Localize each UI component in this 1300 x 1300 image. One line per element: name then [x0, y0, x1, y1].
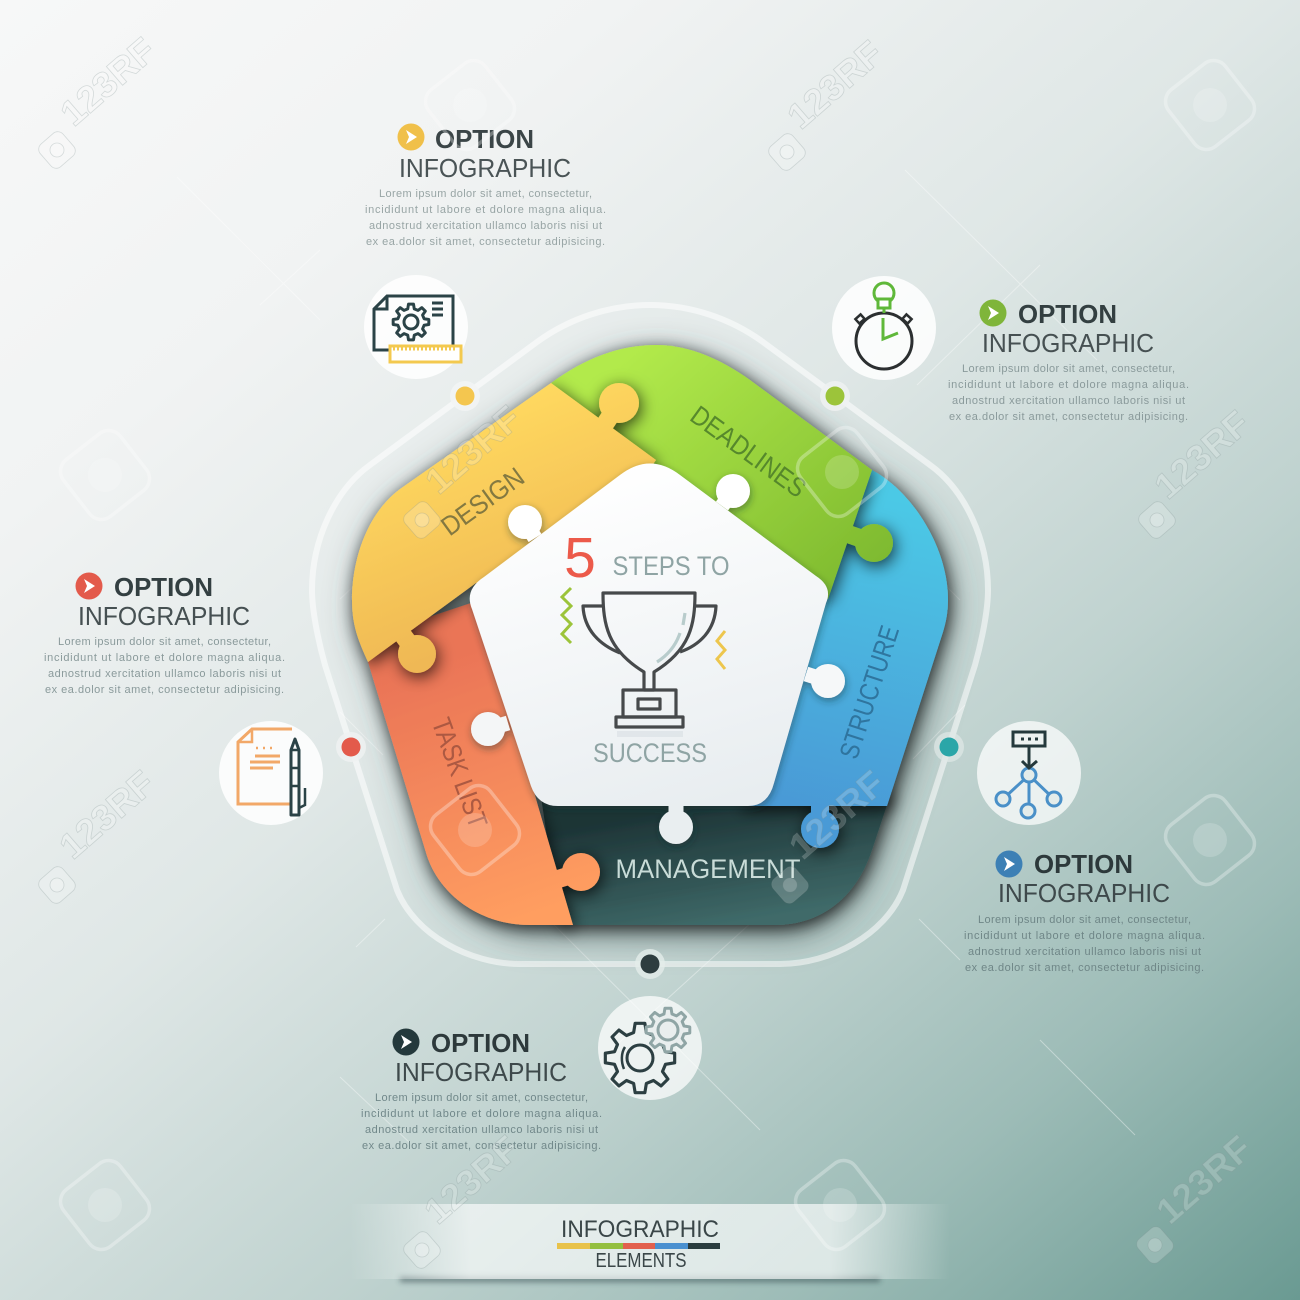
- text block: option dark: incididunt ut labore et dolore magna aliqua.: [361, 1108, 602, 1120]
- text block: option yellow: INFOGRAPHIC: [399, 153, 571, 183]
- text block: option yellow: incididunt ut labore et dolore magna aliqua.: [365, 204, 606, 216]
- segment label: design: DESIGN: [435, 462, 530, 542]
- text block: option blue: adnostrud xercitation ullamco laboris nisi ut: [968, 946, 1201, 958]
- text block: option red: ex ea.dolor sit amet, consectetur adipisicing.: [45, 684, 284, 696]
- segment label: structure: STRUCTURE: [834, 622, 905, 762]
- watermarks: 123RF: [779, 32, 891, 137]
- text block: option blue: ex ea.dolor sit amet, consectetur adipisicing.: [965, 962, 1204, 974]
- text block: option dark: INFOGRAPHIC: [395, 1057, 567, 1087]
- text block: option green: ex ea.dolor sit amet, consectetur adipisicing.: [949, 411, 1188, 423]
- text block: option blue: [964, 849, 1205, 974]
- text block: option red: [44, 572, 285, 696]
- text block: option red: OPTION: [114, 572, 213, 602]
- node: green: [820, 381, 850, 411]
- icon: trophy: [583, 593, 716, 737]
- puzzle: deadlines segment: [551, 345, 893, 599]
- text block: option red: Lorem ipsum dolor sit amet, consectetur,: [58, 636, 271, 648]
- text block: option green: INFOGRAPHIC: [982, 328, 1154, 358]
- icon: document and pen: [219, 721, 323, 825]
- text block: option green: Lorem ipsum dolor sit amet, consectetur,: [962, 363, 1175, 375]
- soft shadow behind puzzle: [357, 353, 953, 938]
- icon: gears: [598, 996, 702, 1100]
- text block: option yellow: adnostrud xercitation ullamco laboris nisi ut: [369, 220, 602, 232]
- text block: option dark: OPTION: [431, 1028, 530, 1058]
- center heading: steps to: STEPS TO: [612, 551, 730, 581]
- outer ring outline: [312, 305, 988, 964]
- text block: option green: adnostrud xercitation ullamco laboris nisi ut: [952, 395, 1185, 407]
- node: yellow: [450, 381, 480, 411]
- segment label: deadlines: DEADLINES: [685, 400, 812, 504]
- watermarks: 123RF: [416, 1127, 528, 1232]
- zigzag: green: [562, 588, 571, 643]
- text block: option blue: Lorem ipsum dolor sit amet, consectetur,: [978, 914, 1191, 926]
- text block: option yellow: Lorem ipsum dolor sit amet, consectetur,: [379, 188, 592, 200]
- segment label: task list: TASK LIST: [426, 714, 493, 832]
- text block: option dark: adnostrud xercitation ullamco laboris nisi ut: [365, 1124, 598, 1136]
- icon: design blueprint: [364, 275, 468, 379]
- bottom banner: INFOGRAPHIC: [561, 1216, 719, 1243]
- watermarks: 123RF: [417, 397, 529, 502]
- node: red: [336, 732, 366, 762]
- center heading: success: SUCCESS: [593, 738, 707, 768]
- watermarks: 123RF: [1146, 402, 1258, 507]
- text block: option yellow: [365, 124, 606, 248]
- icon: stopwatch: [832, 276, 936, 380]
- text block: option dark: ex ea.dolor sit amet, consectetur adipisicing.: [362, 1140, 601, 1152]
- center heading: 5: 5: [564, 526, 596, 590]
- bottom banner: ELEMENTS: [596, 1250, 686, 1272]
- zigzag: yellow: [717, 631, 725, 669]
- text block: option green: incididunt ut labore et dolore magna aliqua.: [948, 379, 1189, 391]
- puzzle: management segment: [540, 790, 892, 925]
- segment label: management: MANAGEMENT: [616, 854, 800, 884]
- node: dark: [635, 949, 665, 979]
- text block: option yellow: ex ea.dolor sit amet, consectetur adipisicing.: [366, 236, 605, 248]
- text block: option dark: [361, 1028, 602, 1152]
- node: teal: [934, 732, 964, 762]
- center white pentagon with tabs: [470, 464, 845, 844]
- text block: option red: INFOGRAPHIC: [78, 601, 250, 631]
- text block: option blue: INFOGRAPHIC: [998, 878, 1170, 908]
- text block: option green: [948, 299, 1189, 423]
- text block: option blue: OPTION: [1034, 849, 1133, 879]
- watermarks: 123RF: [781, 762, 893, 867]
- text block: option red: adnostrud xercitation ullamco laboris nisi ut: [48, 668, 281, 680]
- bottom banner: [350, 1204, 950, 1282]
- puzzle: structure segment: [740, 470, 948, 848]
- text block: option red: incididunt ut labore et dolore magna aliqua.: [44, 652, 285, 664]
- puzzle: design segment: [352, 383, 656, 673]
- watermarks: 123RF: [1148, 1127, 1260, 1232]
- icon: network: [977, 721, 1081, 825]
- text block: option yellow: OPTION: [435, 124, 534, 154]
- text block: option dark: Lorem ipsum dolor sit amet, consectetur,: [375, 1092, 588, 1104]
- watermarks: 123RF: [51, 762, 163, 867]
- puzzle: task list segment: [368, 600, 600, 925]
- text block: option green: OPTION: [1018, 299, 1117, 329]
- text block: option blue: incididunt ut labore et dolore magna aliqua.: [964, 930, 1205, 942]
- watermarks: 123RF: [52, 29, 164, 134]
